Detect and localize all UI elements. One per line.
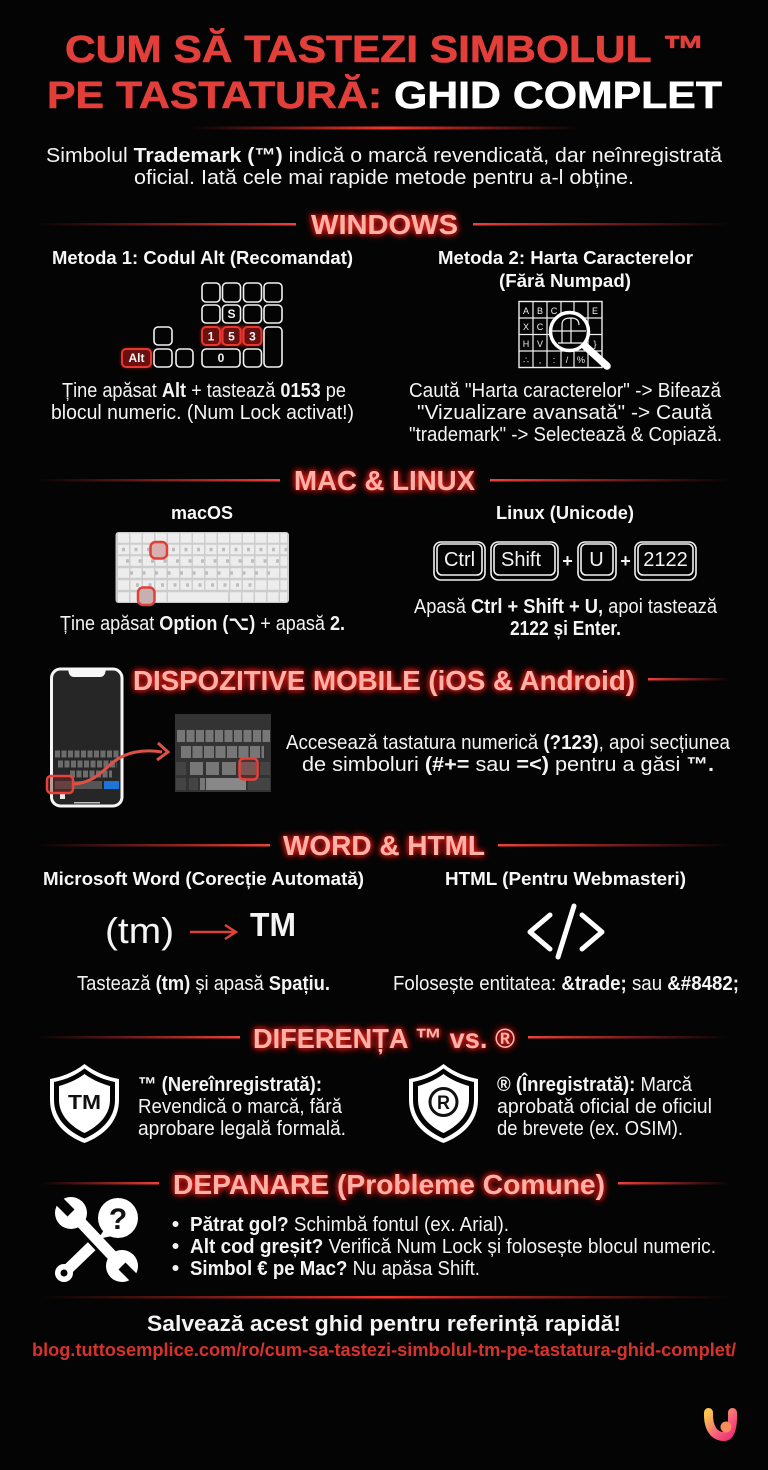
icon: character map with magnifier: H <box>523 339 529 349</box>
description: TM <box>138 1074 346 1140</box>
description: R <box>497 1072 712 1140</box>
icon: character map with magnifier: E <box>592 306 598 316</box>
heading: Metoda 2: Metoda 2: Harta Caracterelor <box>438 248 693 268</box>
icon: symbol keyboard <box>175 714 271 792</box>
section heading: Windows: WINDOWS <box>311 209 458 240</box>
icon: character map with magnifier: , <box>539 355 541 365</box>
title: PE TASTATURĂ: GHID COMPLET <box>47 73 722 117</box>
icon: tm autocorrect: TM <box>250 906 296 943</box>
icon: numeric keypad <box>122 283 282 367</box>
icon: character map with magnifier: % <box>577 355 585 365</box>
heading: Metoda 1: Metoda 1: Codul Alt (Recomandat) <box>52 248 353 268</box>
description: Linux: 2122 și Enter. <box>510 618 621 640</box>
description: Linux <box>414 596 718 640</box>
description: Metoda 1: Ține apăsat Alt + tastează 0153 pe <box>62 380 346 402</box>
icon: TM shield: TM <box>68 1092 101 1114</box>
description: R: aprobată oficial de oficiul <box>497 1096 712 1118</box>
description: TM: aprobare legală formală. <box>138 1118 346 1140</box>
description: HTML: Folosește entitatea: &trade; sau &#8482; <box>393 973 739 995</box>
troubleshooting list: Pătrat gol? Schimbă fontul (ex. Arial). <box>190 1214 509 1236</box>
troubleshooting list: Simbol € pe Mac? Nu apăsa Shift. <box>190 1258 480 1280</box>
heading: Metoda 2: (Fără Numpad) <box>499 271 631 291</box>
section heading: Dispozitive mobile: DISPOZITIVE MOBILE (iOS & Android) <box>133 665 635 696</box>
arrow: phone to keyboard <box>74 743 168 784</box>
icon: numeric keypad: Alt <box>128 351 144 365</box>
description: mobile: Accesează tastatura numerică (?123), apoi secțiunea <box>286 732 731 754</box>
description: mobile <box>286 732 731 776</box>
icon: character map with magnifier: C <box>551 306 558 316</box>
intro text: oficial. Iată cele mai rapide metode pentru a-l obține. <box>134 167 634 189</box>
icon: key combination: 2122 <box>643 549 688 571</box>
intro text <box>46 145 723 189</box>
panel: Microsoft Word <box>43 869 364 995</box>
icon: character map with magnifier: A <box>523 306 529 316</box>
description: Linux: Apasă Ctrl + Shift + U, apoi tastează <box>414 596 718 618</box>
icon: character map with magnifier: X <box>523 322 529 332</box>
icon: numeric keypad: 1 <box>208 330 215 344</box>
icon: key combination: Shift <box>501 549 541 571</box>
heading: Metoda 2 <box>438 248 693 291</box>
panel: TM unregistered <box>50 1064 346 1143</box>
section heading: Depanare: DEPANARE (Probleme Comune) <box>173 1169 605 1200</box>
heading: Linux: Linux (Unicode) <box>496 503 634 523</box>
heading: Word: Microsoft Word (Corecție Automată) <box>43 869 364 889</box>
icon: crossed wrenches with question bubble <box>52 1194 142 1286</box>
description: Metoda 2: Caută "Harta caracterelor" -> Bifează <box>409 380 722 402</box>
description: TM: Revendică o marcă, fără <box>138 1096 343 1118</box>
icon: key combination <box>434 542 696 580</box>
panel: macOS <box>60 503 345 635</box>
panel: HTML <box>393 869 739 995</box>
description: Metoda 2: "trademark" -> Selectează & Copiază. <box>409 424 722 446</box>
icon: numeric keypad: S <box>227 307 236 321</box>
title <box>47 27 722 117</box>
icon: character map with magnifier <box>519 302 607 368</box>
icon: key combination: U <box>589 549 604 571</box>
icon: numeric keypad: 5 <box>228 330 235 344</box>
description: macOS: Ține apăsat Option (⌥) + apasă 2. <box>60 613 345 635</box>
intro text: Simbolul Trademark (™) indică o marcă revendicată, dar neînregistrată <box>46 145 723 167</box>
icon: key combination: + <box>562 551 573 571</box>
icon: key combination: + <box>620 551 631 571</box>
description: TM: ™ (Nereînregistrată): <box>138 1074 322 1096</box>
heading: HTML: HTML (Pentru Webmasteri) <box>445 869 686 889</box>
description: Metoda 1: blocul numeric. (Num Lock activat!) <box>51 402 354 424</box>
troubleshooting list: Alt cod greșit? Verifică Num Lock și folosește blocul numeric. <box>190 1236 716 1258</box>
icon: crossed wrenches with question bubble: ? <box>109 1203 127 1236</box>
title: CUM SĂ TASTEZI SIMBOLUL ™ <box>65 27 705 71</box>
heading: macOS: macOS <box>171 503 233 523</box>
troubleshooting list <box>172 1214 716 1280</box>
panel: R registered <box>409 1064 712 1143</box>
icon: character map with magnifier: } <box>593 339 597 349</box>
icon: TM shield <box>50 1064 119 1143</box>
icon: character map with magnifier: B <box>537 306 543 316</box>
icon: character map with magnifier: : <box>553 355 555 365</box>
logo <box>708 1412 733 1436</box>
description: Metoda 2: "Vizualizare avansată" -> Caută <box>417 402 713 424</box>
description: mobile: de simboluri (#+= sau =<) pentru a găsi ™. <box>302 754 714 776</box>
description: R: de brevete (ex. OSIM). <box>497 1118 683 1140</box>
icon: Mac keyboard <box>116 532 289 605</box>
section heading: Word & HTML: WORD & HTML <box>283 830 485 861</box>
icon: numeric keypad: 0 <box>218 351 225 365</box>
icon: code brackets <box>530 906 602 957</box>
description: R: ® (Înregistrată): Marcă <box>497 1072 693 1096</box>
icon: character map with magnifier: V <box>537 339 543 349</box>
description: Metoda 1 <box>51 380 354 424</box>
section heading: Diferența: DIFERENȚA ™ vs. ® <box>253 1023 515 1054</box>
icon: character map with magnifier: / <box>566 355 569 365</box>
icon: numeric keypad: 3 <box>249 330 256 344</box>
icon: R shield: R <box>437 1093 450 1114</box>
icon: character map with magnifier: C <box>537 322 544 332</box>
icon: R shield <box>409 1064 478 1143</box>
description: Metoda 2 <box>409 380 722 446</box>
panel: Linux <box>414 503 718 640</box>
call to action: Salvează acest ghid pentru referință rapidă! <box>147 1311 621 1336</box>
icon: key combination: Ctrl <box>444 549 475 571</box>
panel: Metoda 2 <box>409 248 722 446</box>
description: Word: Tastează (tm) și apasă Spațiu. <box>77 973 330 995</box>
icon: tm autocorrect: (tm) <box>105 910 174 951</box>
source url: blog.tuttosemplice.com/ro/cum-sa-tastezi-simbolul-tm-pe-tastatura-ghid-complet/ <box>32 1340 736 1360</box>
icon: phone <box>47 669 122 806</box>
icon: character map with magnifier: ∴ <box>523 355 529 365</box>
panel: Metoda 1 <box>51 248 354 424</box>
icon: tm autocorrect <box>105 906 296 951</box>
section heading: Mac & Linux: MAC & LINUX <box>294 465 475 496</box>
